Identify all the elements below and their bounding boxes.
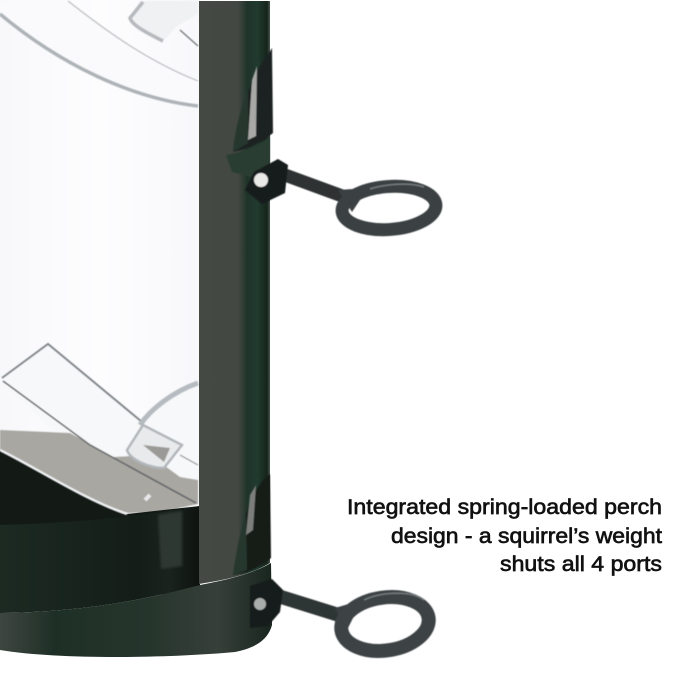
upper perch [245,159,437,233]
caption [347,495,662,576]
caption: shuts all 4 ports [500,552,662,576]
caption: Integrated spring-loaded perch [347,495,662,519]
upper seed ramp [0,1,198,107]
clear seed tube [0,0,200,530]
caption: design - a squirrel’s weight [391,524,662,548]
lower seed port [233,474,271,575]
green support post [199,1,270,584]
base ring [0,563,272,657]
dark seed tray [0,450,200,613]
lower perch [250,579,432,656]
upper seed port [226,48,273,178]
lower seed ramp [0,344,198,513]
